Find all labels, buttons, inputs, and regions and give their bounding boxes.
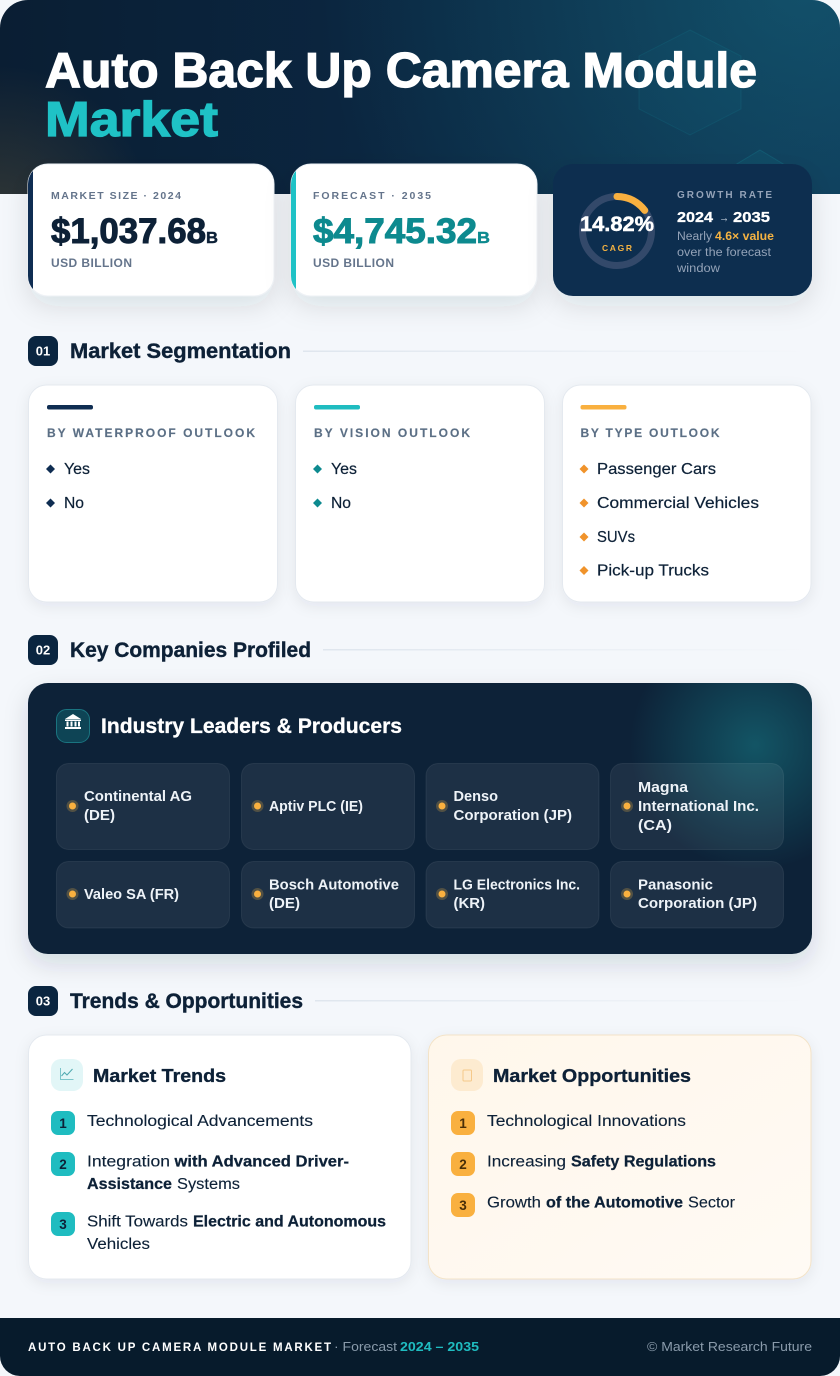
stat card: forecast bbox=[291, 164, 537, 296]
company: Valeo bbox=[56, 862, 230, 928]
stat card: forecast: USD BILLION bbox=[313, 256, 394, 270]
company: LG: LG Electronics Inc. bbox=[454, 878, 580, 894]
trend 2: 2 bbox=[59, 1157, 67, 1172]
stat card: growth rate: Nearly bbox=[677, 231, 712, 243]
trend 3: 3 bbox=[59, 1217, 67, 1232]
footer: · Forecast bbox=[334, 1340, 398, 1354]
stat card: growth rate: GROWTH RATE bbox=[677, 190, 772, 201]
opportunity 3 bbox=[451, 1193, 735, 1217]
panel: market opportunities bbox=[428, 1035, 811, 1279]
company: Magna: (CA) bbox=[638, 818, 672, 834]
trend 2: with Advanced Driver- bbox=[173, 1154, 349, 1170]
section heading 02 bbox=[28, 635, 812, 665]
stat card: growth rate: 2024 bbox=[677, 209, 714, 226]
header banner bbox=[0, 0, 840, 194]
title: Auto Back Up Camera Module bbox=[45, 44, 757, 98]
company: Panasonic: Panasonic bbox=[638, 878, 713, 894]
trend 1 bbox=[51, 1111, 313, 1135]
footer bbox=[0, 1318, 840, 1376]
trend 1: 1 bbox=[59, 1116, 67, 1131]
panel: by vision outlook bbox=[296, 385, 544, 602]
title bbox=[45, 44, 757, 147]
company: Magna: Magna bbox=[638, 780, 689, 796]
company: Denso bbox=[426, 764, 599, 850]
company: Bosch: (DE) bbox=[269, 896, 300, 912]
title: Market bbox=[45, 93, 218, 147]
trend 3: Vehicles bbox=[87, 1236, 150, 1253]
trend 3: Electric and Autonomous bbox=[193, 1214, 386, 1230]
trend 1: Technological Advancements bbox=[87, 1113, 313, 1130]
company: Continental: Continental AG bbox=[84, 789, 192, 805]
stat card: market size: B bbox=[206, 230, 218, 247]
panel: by waterproof outlook: Yes bbox=[64, 461, 90, 478]
opportunity 3: 3 bbox=[459, 1198, 467, 1213]
section heading 01: Market Segmentation bbox=[70, 340, 291, 363]
company: Magna: International Inc. bbox=[638, 799, 759, 815]
stat card: market size: USD BILLION bbox=[51, 256, 132, 270]
opportunity 2: Safety Regulations bbox=[571, 1154, 716, 1170]
icon: line chart bbox=[51, 1059, 83, 1091]
section heading 03: 03 bbox=[36, 994, 50, 1008]
stat card: market size bbox=[28, 164, 274, 296]
opportunity 3: of the Automotive bbox=[546, 1194, 683, 1212]
stat card: growth rate: over the forecast bbox=[677, 247, 772, 259]
trend 3: Shift Towards bbox=[87, 1214, 188, 1230]
stat card: growth rate: 2035 bbox=[733, 209, 770, 226]
CAGR ring: CAGR bbox=[602, 243, 632, 253]
panel: by waterproof outlook: BY WATERPROOF OUTLOOK bbox=[47, 426, 255, 440]
icon: institution bbox=[56, 710, 90, 742]
company: Valeo: Valeo SA (FR) bbox=[84, 887, 179, 903]
company: Panasonic: Corporation (JP) bbox=[638, 896, 757, 912]
footer: 2024 – 2035 bbox=[400, 1340, 479, 1354]
opportunity 1: 1 bbox=[459, 1116, 467, 1131]
trend 2: Assistance bbox=[87, 1176, 172, 1193]
company: LG: (KR) bbox=[454, 896, 485, 912]
trend 2 bbox=[51, 1152, 349, 1193]
opportunity 3: Growth bbox=[487, 1194, 541, 1212]
opportunity 2: Increasing bbox=[487, 1154, 566, 1170]
trend 2: Integration bbox=[87, 1154, 170, 1170]
company: Aptiv: Aptiv PLC (IE) bbox=[269, 799, 363, 815]
panel: key companies bbox=[28, 683, 812, 954]
footer: © Market Research Future bbox=[647, 1340, 812, 1354]
opportunity 3: Sector bbox=[688, 1194, 735, 1212]
company: Bosch bbox=[242, 862, 414, 928]
opportunity 2: 2 bbox=[459, 1157, 467, 1172]
panel: by type outlook: Commercial Vehicles bbox=[597, 495, 759, 512]
panel: by vision outlook: BY VISION OUTLOOK bbox=[314, 426, 470, 440]
opportunity 1: Technological Innovations bbox=[487, 1113, 686, 1130]
panel: by type outlook: SUVs bbox=[597, 529, 635, 546]
section heading 03: Trends & Opportunities bbox=[70, 990, 303, 1013]
trend 3 bbox=[51, 1212, 386, 1253]
panel: by type outlook bbox=[562, 385, 811, 602]
opportunity 2 bbox=[451, 1152, 716, 1176]
stat card: growth rate bbox=[553, 164, 812, 296]
stat card: growth rate: 4.6× value bbox=[715, 231, 774, 243]
panel: key companies: Industry Leaders & Producers bbox=[101, 715, 402, 738]
panel: market trends: Market Trends bbox=[93, 1065, 226, 1086]
company: Bosch: Bosch Automotive bbox=[269, 878, 399, 894]
stat card: market size: MARKET SIZE · 2024 bbox=[51, 190, 181, 202]
company: Magna bbox=[610, 764, 784, 850]
company: Continental: (DE) bbox=[84, 808, 115, 824]
footer: AUTO BACK UP CAMERA MODULE MARKET bbox=[28, 1342, 331, 1354]
panel: by type outlook: Passenger Cars bbox=[597, 461, 716, 478]
section heading 02: 02 bbox=[36, 642, 50, 658]
section heading 01: 01 bbox=[36, 344, 50, 358]
company: Panasonic bbox=[610, 862, 784, 928]
panel: market opportunities: Market Opportunities bbox=[493, 1065, 691, 1086]
section heading 02: Key Companies Profiled bbox=[70, 639, 311, 662]
panel: by vision outlook: Yes bbox=[331, 461, 357, 478]
company: Denso: Corporation (JP) bbox=[454, 808, 572, 824]
stat card: growth rate: → bbox=[719, 209, 729, 225]
CAGR ring: 14.82% bbox=[580, 212, 654, 236]
icon: placeholder glyph bbox=[451, 1059, 483, 1091]
company: Continental bbox=[56, 764, 230, 850]
CAGR ring bbox=[580, 196, 654, 266]
trend 2: Systems bbox=[177, 1176, 240, 1193]
stat card: forecast: B bbox=[477, 230, 490, 247]
stat card: forecast: $4,745.32 bbox=[313, 212, 477, 251]
panel: by waterproof outlook: No bbox=[64, 495, 84, 512]
opportunity 1 bbox=[451, 1111, 686, 1135]
company: Denso: Denso bbox=[454, 789, 498, 805]
stat card: forecast: FORECAST · 2035 bbox=[313, 190, 431, 202]
company: LG bbox=[426, 862, 599, 928]
panel: by vision outlook: No bbox=[331, 495, 351, 512]
section heading 03 bbox=[28, 986, 812, 1016]
section heading 01 bbox=[28, 336, 812, 366]
stat card: growth rate: window bbox=[676, 263, 721, 275]
company: Aptiv bbox=[242, 764, 414, 850]
panel: market trends bbox=[28, 1035, 411, 1279]
panel: by type outlook: Pick-up Trucks bbox=[597, 562, 709, 580]
panel: by type outlook: BY TYPE OUTLOOK bbox=[580, 426, 720, 440]
panel: by waterproof outlook bbox=[28, 385, 278, 602]
stat card: market size: $1,037.68 bbox=[51, 212, 206, 251]
